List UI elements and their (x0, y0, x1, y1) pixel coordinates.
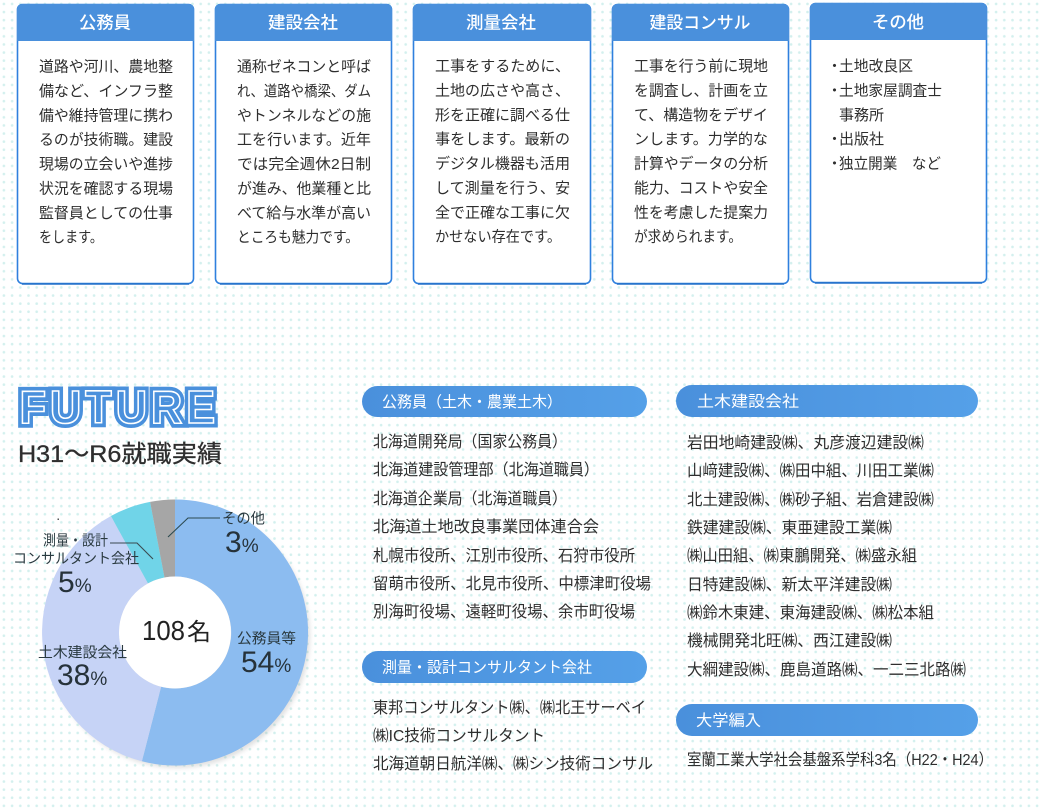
subheading: H31〜R6就職実績: H31～R6就職実績 (18, 441, 222, 468)
text block: 建設会社 description: れ、道路や橋梁、ダム (237, 83, 371, 100)
center total: 108名: 108 (142, 615, 185, 646)
text block: 建設会社 description: 通称ゼネコンと呼ば (237, 58, 371, 76)
list: 土木建設会社 employers: 北土建設㈱、㈱砂子組、岩倉建設㈱ (687, 491, 934, 509)
center total: 108名 (142, 615, 211, 646)
pill heading: 公務員（土木・農業土木）: 公務員（土木・農業土木） (382, 393, 562, 411)
heading: 建設会社: 建設会社 (268, 14, 338, 32)
text block: 測量会社 description: 事をします。最新の (435, 131, 570, 148)
pill heading: 土木建設会社: 土木建設会社 (697, 392, 800, 410)
text block: 測量会社 description: かせない存在です。 (435, 228, 561, 246)
donut chart: 就職実績 (42, 499, 310, 768)
pill heading: 大学編入: 大学編入 (696, 712, 761, 730)
panel: 公務員 (17, 4, 194, 284)
text block: 建設コンサル description: ンします。力学的な (634, 131, 768, 148)
pill heading: 測量・設計コンサルタント会社: 測量・設計コンサルタント会社 (382, 658, 592, 676)
text block: 建設コンサル description: 性を考慮した提案力 (634, 204, 768, 222)
text block: 建設会社 description: が進み、他業種と比 (237, 180, 371, 198)
label: 公務員等 54%: 公務員等 (237, 630, 296, 648)
text block: 公務員 description: るのが技術職。建設 (39, 132, 173, 148)
text block: 公務員 description: 状況を確認する現場 (39, 180, 173, 198)
text block: その他 list: 出版社 (839, 131, 884, 148)
text block: 公務員 description: 現場の立会いや進捗 (39, 156, 173, 173)
label: 公務員等 54% (237, 630, 296, 679)
text block: 公務員 description: 監督員としての仕事 (39, 205, 173, 222)
pill heading: 測量・設計コンサルタント会社 (362, 651, 647, 683)
text block: その他 list: ・ (827, 58, 842, 75)
list: 測量・設計コンサルタント employers (373, 699, 653, 773)
text block: 建設会社 description: では完全週休2日制 (237, 156, 371, 173)
heading: FUTURE: FUTURE (20, 382, 219, 433)
list: 土木建設会社 employers: 岩田地崎建設㈱、丸彦渡辺建設㈱ (687, 434, 924, 452)
panel: その他 (810, 3, 987, 283)
text block: 公務員 description: 備など、インフラ整 (39, 83, 173, 100)
text block: 測量会社 description (435, 58, 570, 246)
text block: 測量会社 description: デジタル機器も活用 (435, 154, 570, 172)
panel: 建設コンサル (612, 4, 789, 284)
label: 土木建設会社 38% (38, 644, 128, 692)
heading: その他: その他 (872, 13, 924, 32)
text block: 測量会社 description: 工事をするために、 (435, 58, 570, 75)
list: 測量・設計コンサルタント employers: 東邦コンサルタント㈱、㈱北王サーベイ (373, 699, 646, 717)
text block: 測量会社 description: して測量を行う、安 (435, 180, 570, 197)
list: 土木建設会社 employers (687, 434, 966, 679)
heading: 測量会社: 測量会社 (466, 14, 536, 32)
heading: FUTURE: FUTURE (20, 382, 219, 433)
list: 土木建設会社 employers: ㈱鈴木東建、東海建設㈱、㈱松本組 (687, 604, 934, 622)
text block: その他 list: ・ (827, 156, 842, 172)
heading: 建設コンサル: 建設コンサル (650, 14, 750, 32)
list: 公務員 employers: 北海道企業局（北海道職員） (373, 490, 567, 508)
text block: 公務員 description: 道路や河川、農地整 (39, 58, 173, 76)
list: 公務員 employers (373, 433, 651, 621)
panel: 建設会社 (215, 4, 392, 284)
text block: その他 list: 独立開業 など (839, 156, 941, 172)
text block: 建設会社 description (237, 58, 371, 246)
list: 測量・設計コンサルタント employers: 北海道朝日航洋㈱、㈱シン技術コンサル (373, 755, 653, 773)
list: 土木建設会社 employers: 鉄建建設㈱、東亜建設工業㈱ (687, 519, 892, 537)
label: 土木建設会社 38%: 38% (57, 659, 107, 692)
list: 土木建設会社 employers: 日特建設㈱、新太平洋建設㈱ (687, 576, 892, 594)
list: 土木建設会社 employers: ㈱山田組、㈱東鵬開発、㈱盛永組 (687, 547, 917, 565)
text block: その他 list: 事務所 (839, 107, 884, 124)
label: 測量・設計コンサルタント会社 5%: 測量・設計 (43, 532, 108, 550)
center total: 108名: 名 (187, 619, 211, 646)
text block: 公務員 description: 備や維持管理に携わ (39, 106, 173, 124)
text block: 建設コンサル description: 能力、コストや安全 (634, 180, 768, 197)
label: その他 3%: その他 (222, 510, 265, 528)
list: 土木建設会社 employers: 機械開発北旺㈱、西江建設㈱ (687, 632, 892, 650)
label: その他 3%: 3% (225, 526, 259, 559)
text block: その他 list: 土地改良区 (839, 58, 913, 75)
text block: 建設コンサル description: を調査し、計画を立 (634, 82, 768, 100)
text block: その他 list: ・ (827, 131, 842, 148)
list: 公務員 employers: 別海町役場、遠軽町役場、余市町役場 (373, 603, 635, 621)
list: 土木建設会社 employers: 大綱建設㈱、鹿島道路㈱、一二三北路㈱ (687, 661, 966, 679)
text block: 測量会社 description: 土地の広さや高さ、 (435, 82, 570, 100)
label: 公務員等 54%: 54% (241, 646, 291, 679)
text block: 建設コンサル description: て、構造物をデザイ (634, 106, 768, 124)
text block: 測量会社 description: 形を正確に調べる仕 (435, 107, 570, 124)
text block: 公務員 description (39, 58, 173, 246)
text block: 建設コンサル description (634, 58, 768, 246)
text block: 建設会社 description: べて給与水準が高い (237, 205, 371, 222)
list: 公務員 employers: 留萌市役所、北見市役所、中標津町役場 (373, 575, 651, 593)
text block: 建設コンサル description: 計算やデータの分析 (634, 154, 768, 172)
list: 土木建設会社 employers: 山﨑建設㈱、㈱田中組、川田工業㈱ (687, 462, 934, 480)
pill heading: 公務員（土木・農業土木） (362, 386, 647, 417)
label: 測量・設計コンサルタント会社 5% (13, 532, 139, 599)
label: 測量・設計コンサルタント会社 5%: コンサルタント会社 (13, 550, 139, 568)
arrow: その他 leader line (168, 518, 220, 537)
pill heading: 大学編入 (676, 704, 978, 736)
text block: その他 list: ・ (827, 82, 842, 100)
list: 公務員 employers: 北海道建設管理部（北海道職員） (373, 461, 599, 479)
list: 公務員 employers: 札幌市役所、江別市役所、石狩市役所 (373, 547, 635, 565)
text block: 建設コンサル description: が求められます。 (634, 228, 742, 246)
text block: その他 list: 土地家屋調査士 (839, 82, 942, 100)
list: 公務員 employers: 北海道開発局（国家公務員） (373, 433, 567, 451)
pill heading: 土木建設会社 (676, 385, 978, 417)
text block: 測量会社 description: 全で正確な工事に欠 (435, 204, 570, 222)
list: 測量・設計コンサルタント employers: ㈱IC技術コンサルタント (373, 727, 545, 745)
panel: 測量会社 (413, 4, 591, 284)
text block: 建設会社 description: やトンネルなどの施 (237, 108, 371, 124)
arrow: 測量・設計 leader line (110, 543, 153, 559)
label: 測量・設計コンサルタント会社 5%: 5% (58, 566, 92, 599)
text block: 建設会社 description: ところも魅力です。 (237, 229, 359, 246)
label: 土木建設会社 38%: 土木建設会社 (38, 644, 128, 662)
text block: その他 list (827, 58, 942, 172)
label: その他 3% (222, 510, 265, 559)
text block: 大学編入 destination: 室蘭工業大学社会基盤系学科3名（H22・H24） (687, 751, 993, 769)
heading: 公務員: 公務員 (79, 14, 131, 32)
list: 公務員 employers: 北海道土地改良事業団体連合会 (373, 518, 599, 536)
text block: 建設コンサル description: 工事を行う前に現地 (634, 58, 768, 75)
text block: 公務員 description: をします。 (39, 229, 103, 246)
text block: 建設会社 description: 工を行います。近年 (237, 132, 371, 148)
